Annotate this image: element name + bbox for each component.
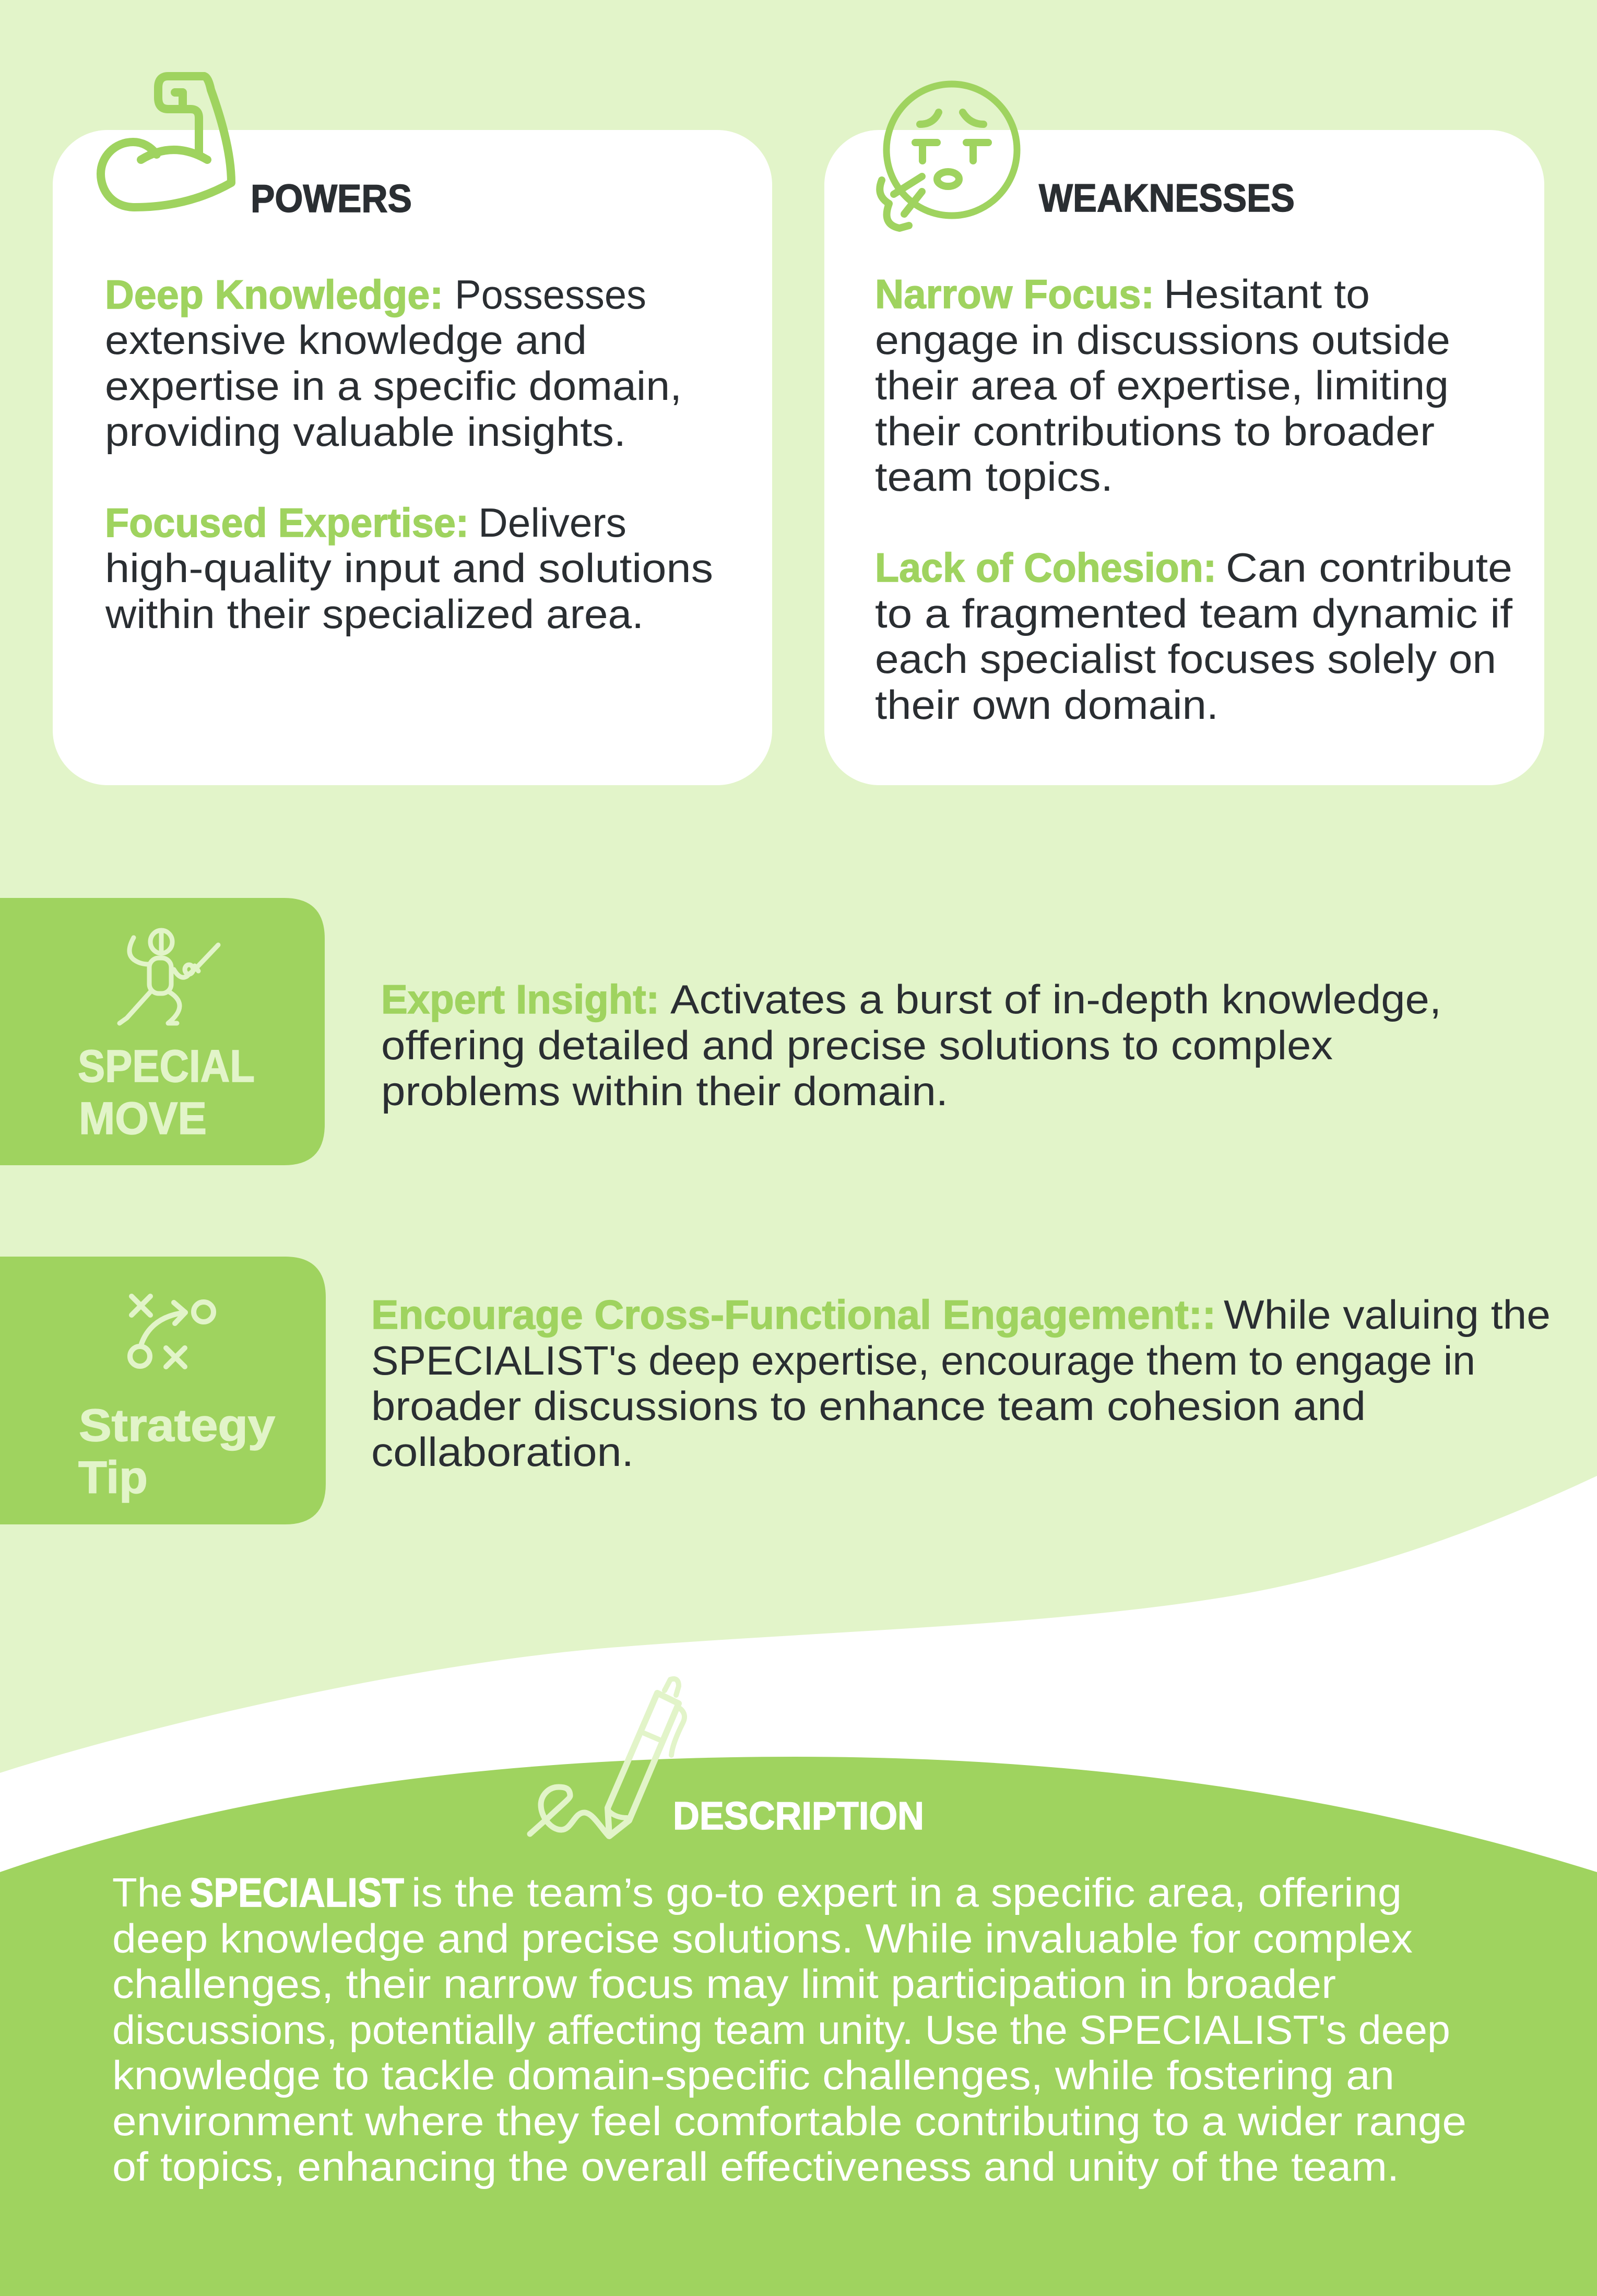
text: focused expertise bbox=[105, 500, 713, 637]
text: description body: of topics, enhancing the overall effectiveness and unity of the team. bbox=[112, 2144, 1399, 2190]
text: expert insight: Expert Insight: bbox=[381, 976, 659, 1022]
text: deep knowledge: Possesses bbox=[455, 271, 646, 317]
background wave bbox=[0, 0, 1597, 1773]
text: expert insight: problems within their domain. bbox=[381, 1068, 948, 1114]
text: expert insight: offering detailed and precise solutions to complex bbox=[381, 1022, 1333, 1068]
label: strategy tip bbox=[78, 1400, 275, 1503]
text: narrow focus: team topics. bbox=[875, 454, 1113, 500]
text: description body bbox=[112, 1869, 1466, 2190]
label: strategy tip: Strategy bbox=[79, 1400, 275, 1451]
icon: pen signature bbox=[530, 1679, 684, 1836]
text: narrow focus: Hesitant to bbox=[1164, 271, 1370, 317]
text: narrow focus: their area of expertise, limiting bbox=[875, 362, 1449, 408]
text: description body: is the team’s go-to expert in a specific area, offering bbox=[411, 1869, 1402, 1915]
panel: special move badge bbox=[0, 898, 325, 1165]
text: cross-functional engagement: SPECIALIST's deep expertise, encourage them to engage in bbox=[371, 1338, 1475, 1383]
text: cross-functional engagement: While valuing the bbox=[1224, 1292, 1551, 1338]
label: special move bbox=[78, 1041, 255, 1144]
text: description body: SPECIALIST bbox=[190, 1869, 404, 1915]
icon: fencer bbox=[120, 930, 218, 1023]
panel: weaknesses bbox=[824, 84, 1544, 785]
text: narrow focus: Narrow Focus: bbox=[875, 271, 1154, 317]
text: description body: The bbox=[112, 1869, 183, 1915]
text: focused expertise: within their specialized area. bbox=[105, 591, 644, 637]
text: description body: knowledge to tackle domain-specific challenges, while fostering an bbox=[112, 2052, 1394, 2098]
heading: powers: POWERS bbox=[251, 176, 412, 220]
text: deep knowledge: Deep Knowledge: bbox=[105, 271, 443, 317]
label: special move: MOVE bbox=[79, 1093, 207, 1144]
panel: powers bbox=[53, 76, 772, 785]
text: lack of cohesion bbox=[875, 545, 1512, 728]
text: description body: deep knowledge and precise solutions. While invaluable for complex bbox=[112, 1915, 1413, 1961]
icon: flexed arm bbox=[101, 76, 231, 207]
heading: weaknesses: WEAKNESSES bbox=[1039, 176, 1295, 220]
text: cross-functional engagement bbox=[371, 1292, 1551, 1475]
text: expert insight bbox=[381, 976, 1441, 1114]
text: deep knowledge bbox=[105, 271, 682, 455]
text: focused expertise: Delivers bbox=[478, 500, 626, 546]
text: lack of cohesion: to a fragmented team dynamic if bbox=[875, 590, 1512, 636]
text: cross-functional engagement: broader discussions to enhance team cohesion and bbox=[371, 1383, 1366, 1429]
text: description body: environment where they feel comfortable contributing to a wider range bbox=[112, 2098, 1466, 2144]
text: cross-functional engagement: Encourage Cross-Functional Engagement:: bbox=[371, 1292, 1216, 1338]
text: deep knowledge: extensive knowledge and bbox=[105, 317, 587, 363]
text: lack of cohesion: Lack of Cohesion: bbox=[875, 545, 1216, 590]
label: special move: SPECIAL bbox=[78, 1041, 255, 1092]
icon: sick face bbox=[880, 84, 1017, 228]
panel: description bbox=[0, 1679, 1597, 2296]
text: lack of cohesion: their own domain. bbox=[875, 682, 1219, 728]
text: narrow focus: their contributions to broader bbox=[875, 408, 1435, 454]
text: narrow focus bbox=[875, 271, 1450, 500]
text: deep knowledge: providing valuable insights. bbox=[105, 409, 626, 455]
text: focused expertise: high-quality input and solutions bbox=[105, 545, 713, 591]
text: expert insight: Activates a burst of in-depth knowledge, bbox=[670, 976, 1441, 1022]
text: deep knowledge: expertise in a specific domain, bbox=[105, 363, 682, 409]
panel: strategy tip badge bbox=[0, 1257, 326, 1524]
text: description body: challenges, their narrow focus may limit participation in broader bbox=[112, 1961, 1336, 2007]
text: cross-functional engagement: collaboration. bbox=[371, 1429, 634, 1475]
heading: description: DESCRIPTION bbox=[673, 1794, 924, 1838]
text: lack of cohesion: Can contribute bbox=[1226, 545, 1512, 590]
text: narrow focus: engage in discussions outside bbox=[875, 317, 1450, 363]
text: description body: discussions, potentially affecting team unity. Use the SPECIALIST's deep bbox=[112, 2007, 1450, 2053]
text: focused expertise: Focused Expertise: bbox=[105, 500, 469, 546]
label: strategy tip: Tip bbox=[78, 1452, 148, 1503]
icon: playbook bbox=[130, 1296, 214, 1367]
text: lack of cohesion: each specialist focuses solely on bbox=[875, 636, 1496, 682]
